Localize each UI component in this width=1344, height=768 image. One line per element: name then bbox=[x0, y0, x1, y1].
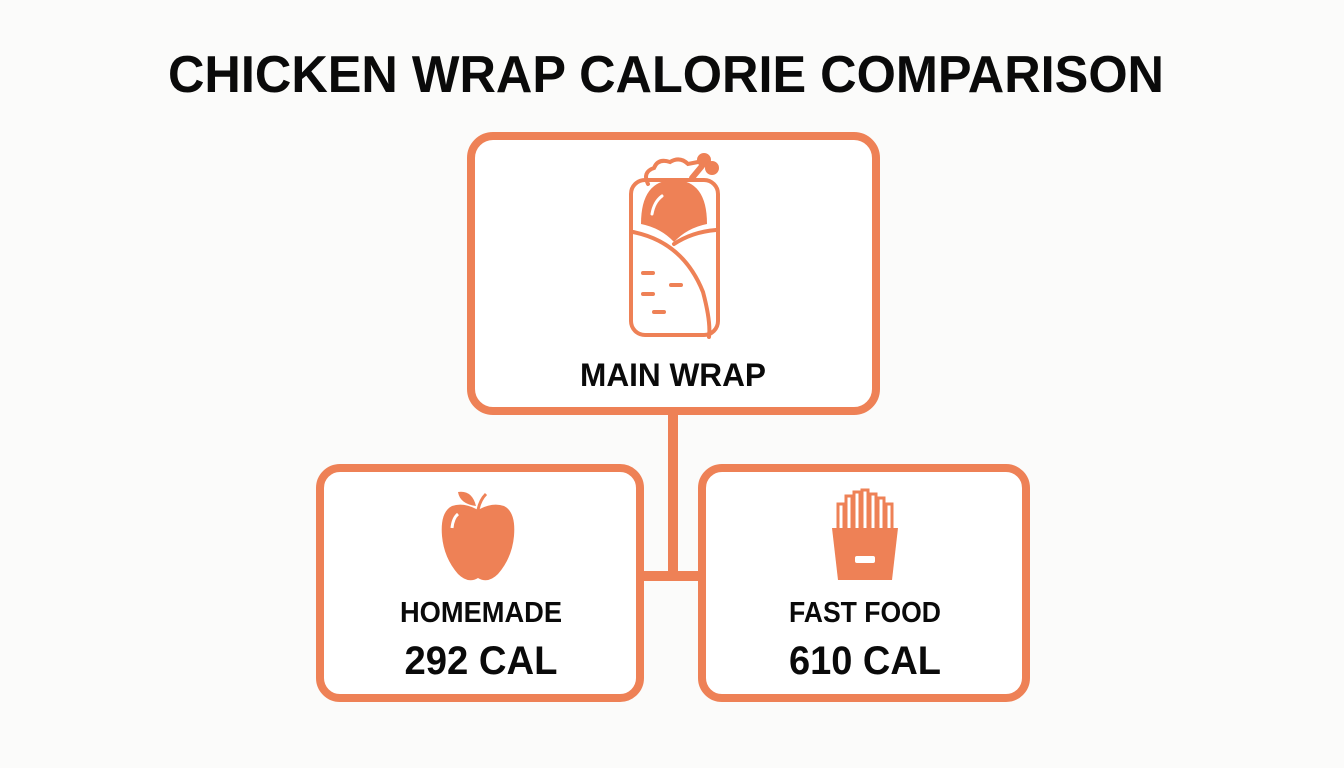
label: homemade: HOMEMADE bbox=[400, 597, 562, 629]
icon: fries bbox=[832, 490, 898, 580]
panel: main wrap bbox=[471, 136, 876, 411]
value: 610 cal: 610 CAL bbox=[789, 639, 941, 683]
value: 292 cal: 292 CAL bbox=[404, 639, 558, 683]
panel: homemade bbox=[320, 468, 640, 698]
icon: chicken wrap bbox=[631, 155, 718, 337]
label: main wrap: MAIN WRAP bbox=[580, 357, 766, 393]
connector lines bbox=[640, 412, 702, 581]
label: fast food: FAST FOOD bbox=[789, 597, 941, 629]
panel: fast food bbox=[702, 468, 1026, 698]
icon: apple bbox=[442, 492, 514, 580]
title: CHICKEN WRAP CALORIE COMPARISON bbox=[168, 46, 1164, 104]
